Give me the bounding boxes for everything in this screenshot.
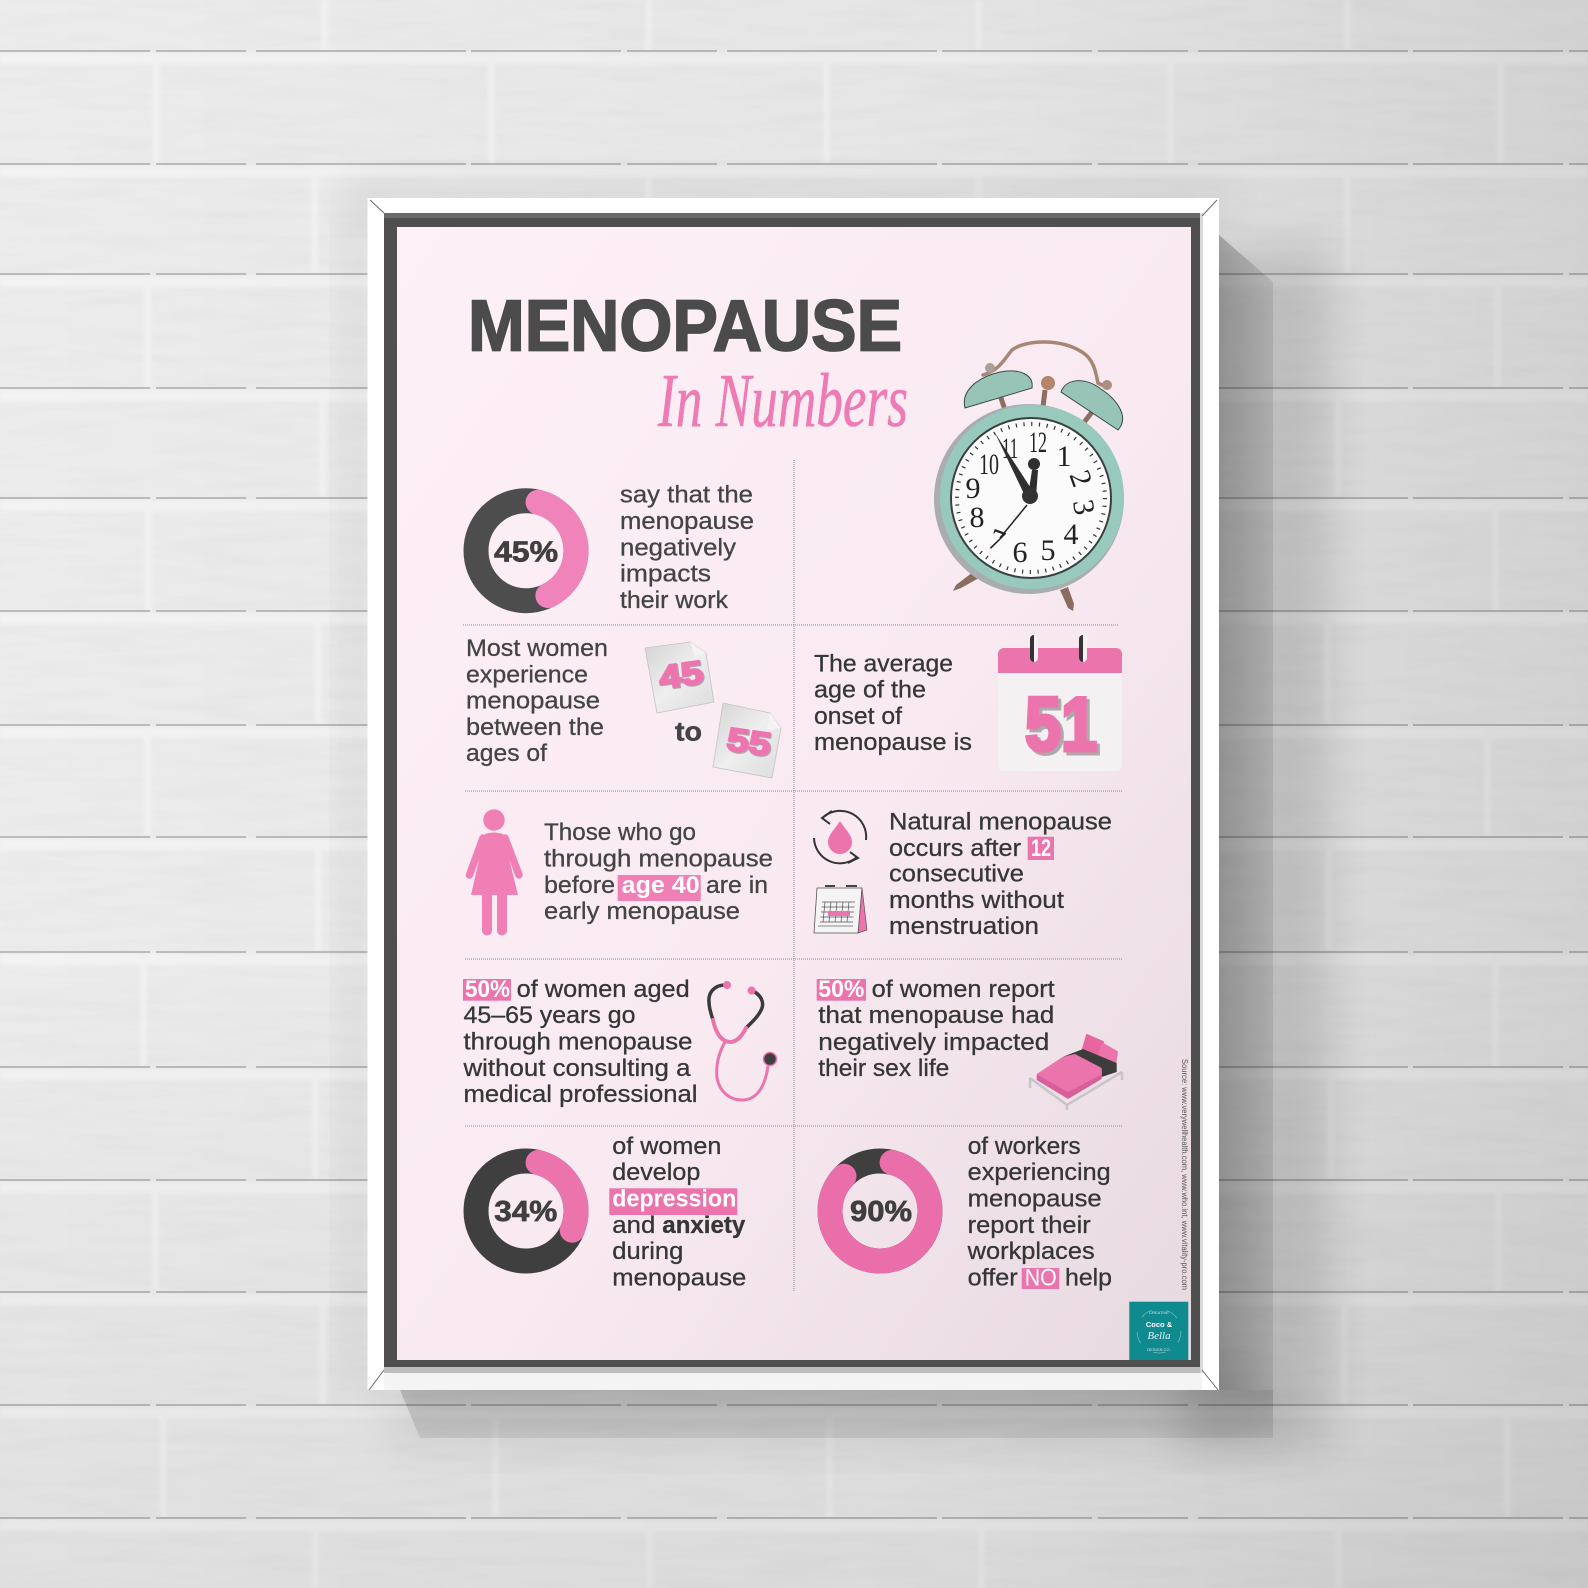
text: depression and anxiety: anxiety xyxy=(662,1212,746,1239)
text: negative impact on work xyxy=(620,482,754,614)
logo badge: Bella xyxy=(1147,1330,1171,1342)
panel: 45 percent xyxy=(476,482,754,614)
text: 50 percent sex life: their sex life xyxy=(818,1055,949,1082)
icon: cycle with drop xyxy=(814,811,866,863)
text: twelve months: consecutive xyxy=(889,861,1024,888)
title: MENOPAUSE xyxy=(468,286,902,366)
text: workplaces offer no help: help xyxy=(1065,1265,1112,1292)
clock numerals: 10 xyxy=(979,448,999,481)
text: 50 percent no consultation xyxy=(462,976,698,1108)
text: twelve months: months without xyxy=(889,887,1064,914)
clock numerals: 11 xyxy=(1002,432,1018,465)
clock numerals: 7 xyxy=(984,522,1009,558)
text: twelve months xyxy=(889,808,1112,940)
text: most women: menopause xyxy=(466,688,600,715)
text: workplaces offer no help xyxy=(967,1133,1112,1292)
text: workplaces offer no help: report their xyxy=(968,1212,1091,1239)
logo badge xyxy=(1129,1302,1188,1360)
text: negative impact on work: impacts xyxy=(620,561,711,588)
donut chart 34%: 34% xyxy=(494,1196,558,1228)
logo badge: Coco & xyxy=(1146,1320,1173,1329)
donut chart 45% xyxy=(476,501,576,601)
text: depression and anxiety: menopause xyxy=(612,1265,746,1292)
text: depression and anxiety: depression xyxy=(612,1186,736,1213)
text: depression and anxiety: develop xyxy=(612,1159,700,1186)
text: 50 percent no consultation: through menopause xyxy=(464,1029,692,1056)
text: twelve months: 12 xyxy=(1031,835,1051,862)
text: negative impact on work: menopause xyxy=(620,508,754,535)
clock numerals: 12 xyxy=(1029,426,1047,459)
text: most women: Most women xyxy=(466,635,608,662)
text: before age 40: age 40 xyxy=(622,872,700,899)
logo badge: CREATIVE xyxy=(1149,1310,1169,1315)
clock numerals: 1 xyxy=(1056,440,1072,473)
text: most women: experience xyxy=(466,661,588,688)
text: depression and anxiety: during xyxy=(612,1238,683,1265)
clock feet xyxy=(953,572,1074,611)
clock numerals: 6 xyxy=(1012,536,1028,569)
text: most women: ages of xyxy=(466,740,547,767)
donut chart 45%: 45% xyxy=(494,536,558,568)
white picture frame xyxy=(368,198,1219,1390)
text: twelve months: Natural menopause xyxy=(889,808,1112,835)
frame shadow on wall xyxy=(340,175,1330,1450)
source note: Source: www.verywellhealth.com, www.who.int, www.vitality-pro.com xyxy=(1180,1059,1190,1290)
clock numerals: 9 xyxy=(966,472,980,505)
text: before age 40: through menopause xyxy=(544,846,773,873)
word: to: to xyxy=(675,717,702,747)
text: 50 percent sex life: negatively impacted xyxy=(818,1029,1049,1056)
clock numerals: 3 xyxy=(1066,497,1101,518)
text: 50 percent sex life: 50% xyxy=(818,976,864,1003)
icon: calendar 51: 51 xyxy=(1025,682,1097,768)
panel: natural menopause xyxy=(814,808,1112,940)
icon: paper note 55: 55 xyxy=(725,721,773,763)
donut chart 34% xyxy=(476,1161,576,1261)
panel: ages 45 to 55 xyxy=(466,635,781,778)
clock numerals: 8 xyxy=(970,501,984,534)
text: 50 percent sex life: that menopause had xyxy=(818,1002,1054,1029)
clock numerals: 4 xyxy=(1064,518,1078,551)
text: average age xyxy=(814,651,972,756)
panel: early menopause xyxy=(470,809,773,936)
donut chart 90% xyxy=(830,1161,930,1261)
logo badge: DESIGN CO. xyxy=(1147,1347,1171,1352)
text: before age 40 xyxy=(544,819,773,925)
text: 50 percent no consultation: without consulting a xyxy=(462,1055,691,1082)
text: workplaces offer no help: workplaces xyxy=(967,1238,1095,1265)
text: 50 percent sex life: of women report xyxy=(872,976,1055,1003)
text: workplaces offer no help: menopause xyxy=(968,1186,1102,1213)
text: negative impact on work: their work xyxy=(620,587,729,614)
icon: paper note 55 xyxy=(713,703,781,778)
text: most women xyxy=(466,635,608,767)
clock bells xyxy=(964,371,1123,430)
text: depression and anxiety: of women xyxy=(612,1133,721,1160)
text: workplaces offer no help: experiencing xyxy=(968,1159,1111,1186)
icon: paper note 45 xyxy=(645,642,714,713)
text: 50 percent no consultation: of women aged xyxy=(517,976,690,1003)
icon: stethoscope xyxy=(709,982,776,1100)
clock numerals: 5 xyxy=(1040,534,1056,567)
text: depression and anxiety: and xyxy=(612,1212,655,1239)
panel: 90 percent xyxy=(830,1133,1112,1292)
clock handle xyxy=(983,342,1108,388)
text: negative impact on work: say that the xyxy=(620,482,753,509)
icon: woman figure xyxy=(470,809,519,936)
dotted grid dividers xyxy=(463,460,1122,1292)
text: before age 40: before xyxy=(544,872,615,899)
text: most women: between the xyxy=(466,714,604,741)
icon: paper note 45: 45 xyxy=(657,654,705,696)
text: average age: The average xyxy=(814,651,953,678)
subtitle: In Numbers xyxy=(657,359,908,443)
panel: sex life xyxy=(817,976,1122,1110)
icon: calendar 51 xyxy=(998,635,1122,771)
clock numerals: 2 xyxy=(1063,466,1099,491)
text: workplaces offer no help: of workers xyxy=(968,1133,1081,1160)
panel: 34 percent xyxy=(476,1133,746,1292)
text: average age: onset of xyxy=(814,703,902,730)
text: 50 percent no consultation: 45–65 years go xyxy=(464,1002,636,1029)
text: negative impact on work: negatively xyxy=(620,534,737,561)
text: 50 percent no consultation: 50% xyxy=(465,976,510,1003)
text: average age: age of the xyxy=(814,677,926,704)
text: depression and anxiety xyxy=(609,1133,746,1292)
text: before age 40: early menopause xyxy=(544,898,740,925)
text: twelve months: occurs after xyxy=(889,835,1021,862)
text: twelve months: menstruation xyxy=(889,913,1039,940)
icon: month calendar xyxy=(814,886,867,933)
donut chart 90%: 90% xyxy=(850,1196,912,1228)
panel: no medical consultation xyxy=(462,976,776,1108)
clock numerals xyxy=(966,426,1101,569)
text: workplaces offer no help: offer xyxy=(968,1265,1018,1292)
text: average age: menopause is xyxy=(814,729,972,756)
panel: average age 51 xyxy=(814,635,1122,771)
text: 50 percent sex life xyxy=(817,976,1055,1082)
poster sheet xyxy=(397,227,1191,1360)
icon: bed xyxy=(1030,1035,1122,1110)
text: 50 percent no consultation: medical professional xyxy=(464,1081,698,1108)
text: before age 40: Those who go xyxy=(544,819,696,846)
text: before age 40: are in xyxy=(706,872,768,899)
clock body xyxy=(934,404,1124,594)
clock hands xyxy=(995,433,1040,538)
alarm clock illustration xyxy=(934,342,1124,611)
clock knobs and posts xyxy=(985,363,1112,425)
text: workplaces offer no help: NO xyxy=(1025,1265,1057,1292)
